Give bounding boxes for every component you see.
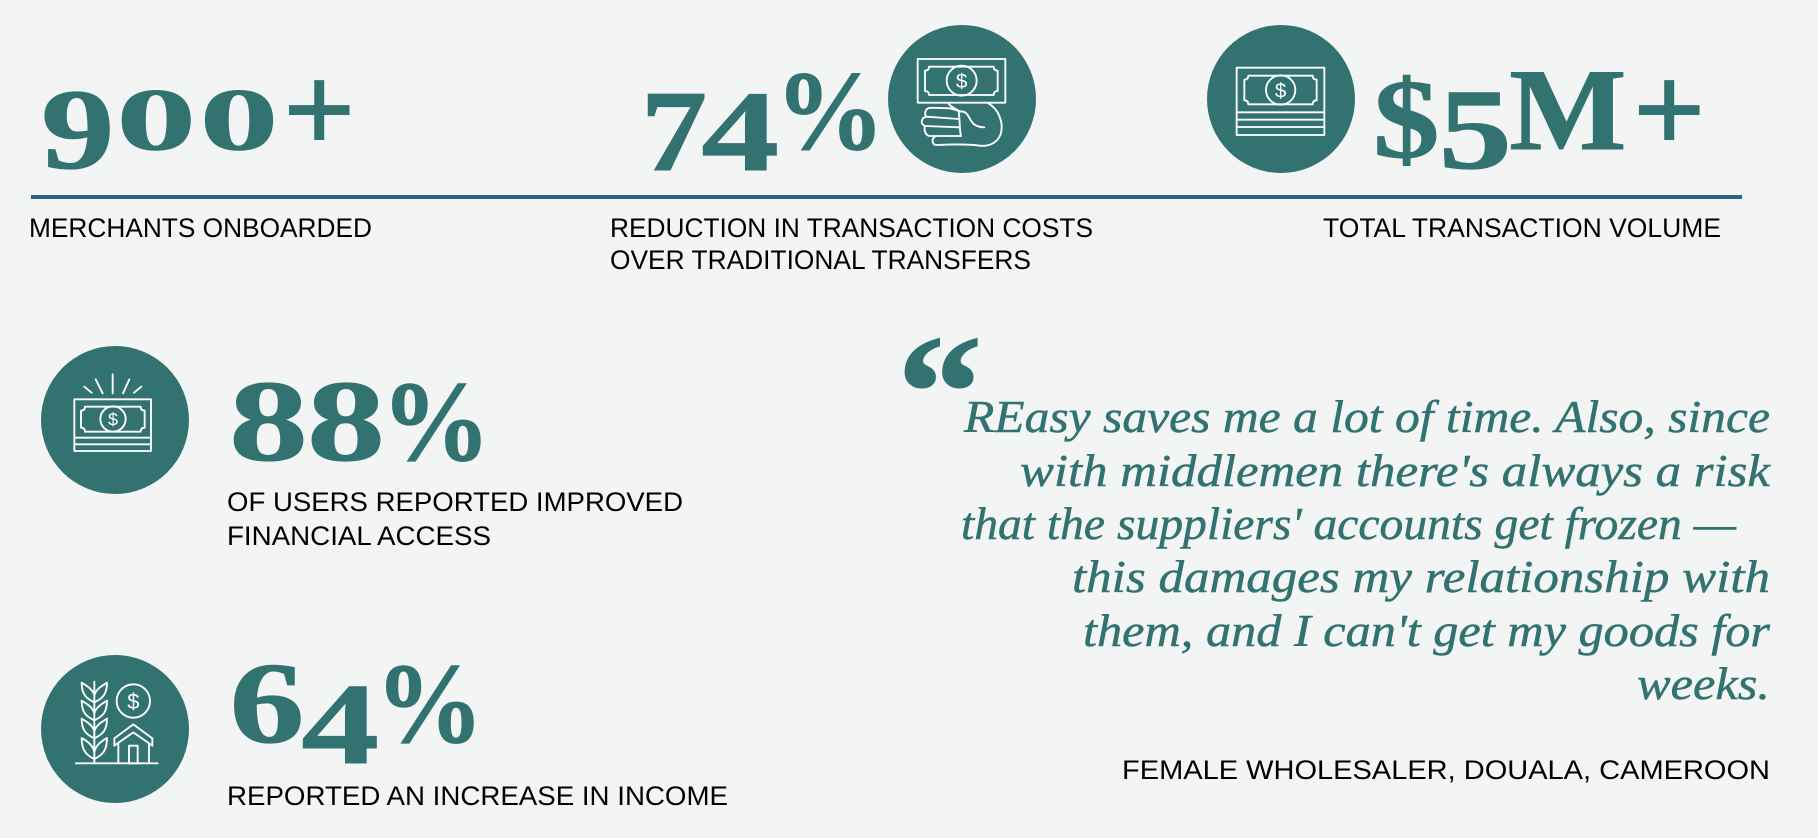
stat: 900+ merchants onboarded: +	[283, 40, 356, 180]
testimonial quote: with middlemen there's always a risk	[1020, 446, 1771, 496]
stat: $5M+ total transaction volume: $	[1373, 56, 1440, 182]
stat: 74% reduction in transaction costs	[610, 49, 1093, 275]
testimonial quote: this damages my relationship with	[1072, 552, 1770, 602]
stat: 88% improved financial access: 8	[229, 356, 308, 485]
stat: 900+ merchants onboarded	[29, 40, 372, 243]
stat: 74% reduction in transaction costs: %	[775, 49, 885, 174]
icon: stack of banknotes: $	[1275, 79, 1287, 102]
testimonial quote	[961, 392, 1771, 709]
stat: $5M+ total transaction volume	[1323, 40, 1721, 243]
stat: 900+ merchants onboarded: 0	[200, 70, 278, 169]
stat: 74% reduction in transaction costs: REDUCTION IN TRANSACTION COSTS	[610, 213, 1093, 243]
icon: wheat, coin and house: $	[127, 689, 139, 714]
icon: banknotes with shine rays: $	[108, 409, 118, 429]
stat: 88% improved financial access: %	[381, 359, 491, 486]
icon: wheat, coin and house	[41, 655, 189, 803]
testimonial quote: them, and I can't get my goods for	[1083, 606, 1771, 656]
stat: 74% reduction in transaction costs: 7	[641, 67, 707, 195]
stat: $5M+ total transaction volume: 5	[1439, 67, 1512, 193]
stat: 900+ merchants onboarded: 0	[116, 71, 196, 169]
icon: hand holding banknote: $	[956, 70, 968, 93]
testimonial quote: REasy saves me a lot of time. Also, since	[963, 392, 1770, 442]
stat: 74% reduction in transaction costs: 4	[701, 67, 779, 195]
testimonial quote: that the suppliers' accounts get frozen —	[961, 499, 1737, 549]
stat: 88% improved financial access	[227, 356, 683, 551]
stat: 64% increase in income: REPORTED AN INCREASE IN INCOME	[227, 781, 728, 811]
stat: 64% increase in income: 4	[301, 660, 379, 788]
stat: 88% improved financial access: OF USERS REPORTED IMPROVED	[227, 487, 683, 517]
icon: stack of banknotes	[1207, 25, 1355, 173]
stat: 900+ merchants onboarded: 9	[41, 65, 114, 193]
quote attribution: FEMALE WHOLESALER, DOUALA, CAMEROON	[1122, 755, 1770, 785]
stat: 64% increase in income	[227, 640, 728, 811]
testimonial quote: weeks.	[1637, 659, 1770, 709]
stat: 88% improved financial access: FINANCIAL ACCESS	[227, 521, 491, 551]
stat: 64% increase in income: %	[375, 641, 483, 768]
icon: hand holding banknote	[888, 25, 1036, 173]
quote mark: “	[897, 303, 982, 483]
stat: $5M+ total transaction volume: TOTAL TRANSACTION VOLUME	[1323, 213, 1721, 243]
stat: 64% increase in income: 6	[230, 640, 305, 768]
icon: banknotes with shine rays	[41, 346, 189, 494]
stat: $5M+ total transaction volume: M	[1509, 45, 1627, 175]
stat: 88% improved financial access: 8	[307, 357, 385, 485]
stat: $5M+ total transaction volume: +	[1633, 40, 1706, 180]
stat: 74% reduction in transaction costs: OVER TRADITIONAL TRANSFERS	[610, 245, 1031, 275]
stat: 900+ merchants onboarded: MERCHANTS ONBOARDED	[29, 213, 372, 243]
